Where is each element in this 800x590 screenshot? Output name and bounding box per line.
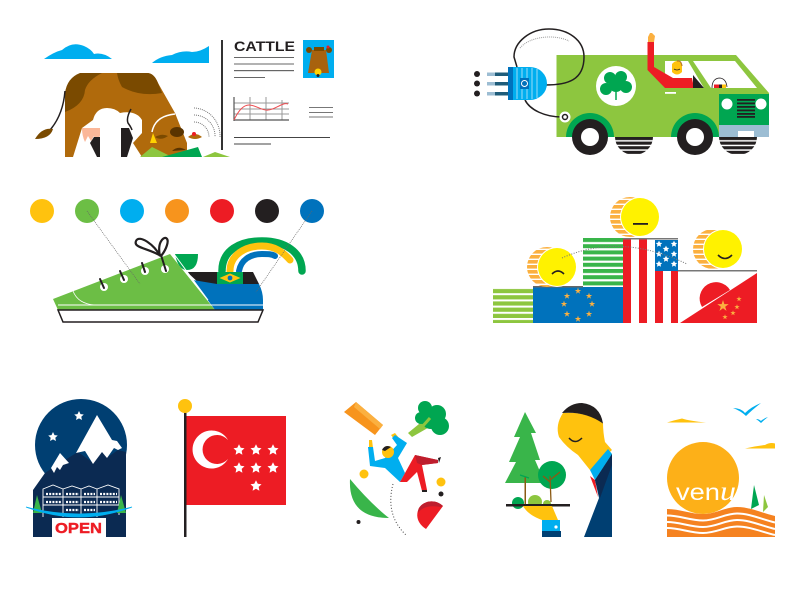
panel: cattle bbox=[35, 38, 334, 157]
van body bbox=[556, 55, 769, 137]
icon: plug bbox=[474, 67, 547, 100]
icon: clouds bbox=[44, 44, 209, 63]
pole ball bbox=[178, 399, 192, 413]
power cord bbox=[514, 29, 584, 122]
icon: cow stamp with bell bbox=[303, 40, 334, 78]
tray bbox=[506, 504, 570, 506]
logo text: ven u bbox=[676, 476, 736, 506]
man climbing bbox=[368, 433, 441, 492]
panel: electric van bbox=[474, 29, 769, 155]
panel: venu logo bbox=[667, 403, 775, 537]
waves bbox=[667, 507, 775, 537]
sun bbox=[667, 442, 739, 514]
line chart bbox=[234, 97, 289, 121]
waiter head bbox=[558, 403, 612, 470]
flag pole bbox=[184, 406, 186, 537]
divider post bbox=[221, 40, 223, 150]
coin: happy bbox=[693, 229, 743, 269]
colour swatches bbox=[30, 199, 324, 223]
text lines bottom bbox=[234, 137, 330, 144]
stars bbox=[48, 411, 84, 441]
dotted path bbox=[391, 484, 406, 535]
ribbon bbox=[26, 507, 132, 517]
panel: mountain hotel badge bbox=[26, 399, 132, 537]
small tree bbox=[538, 461, 566, 502]
wheel arches and wheels bbox=[566, 113, 757, 155]
EU flag bbox=[533, 286, 623, 323]
pointer lines bbox=[87, 211, 312, 292]
birds bbox=[733, 403, 768, 423]
night sky circle bbox=[35, 399, 127, 491]
van front grille bbox=[719, 94, 769, 137]
shoe bbox=[53, 238, 263, 322]
text lines small bbox=[309, 107, 333, 118]
heading: cattle: CATTLE bbox=[234, 38, 295, 54]
van rear window with driver bbox=[648, 33, 704, 94]
flag stars bbox=[233, 444, 279, 491]
hand and cuff bbox=[523, 506, 561, 537]
panel: waiter with trees bbox=[505, 403, 612, 537]
tall tree trunk bbox=[520, 475, 529, 505]
red flag bbox=[186, 416, 286, 505]
China flag bbox=[678, 270, 757, 323]
tall tree bbox=[505, 412, 545, 483]
dark mountain bbox=[33, 450, 126, 537]
sails bbox=[751, 485, 768, 512]
green stripes block middle bbox=[583, 238, 623, 287]
coin: neutral bbox=[610, 197, 660, 237]
red half circle bbox=[417, 501, 443, 529]
icon: clover bbox=[596, 66, 636, 106]
dots bbox=[356, 470, 446, 524]
panel: currencies podium bbox=[493, 197, 757, 323]
panel: flag bbox=[178, 399, 286, 537]
hotel bbox=[43, 485, 119, 517]
clouds bbox=[667, 418, 775, 448]
crescent bbox=[193, 430, 228, 468]
pine trees bbox=[33, 495, 126, 513]
van front window bbox=[693, 61, 757, 88]
panel: falling man bbox=[344, 401, 449, 535]
USA flag bbox=[623, 238, 678, 323]
suit bbox=[584, 449, 612, 537]
rainbow arc bbox=[222, 241, 302, 271]
coin: sad bbox=[527, 247, 577, 287]
green stripes block left bbox=[493, 287, 533, 323]
bushes bbox=[512, 495, 551, 509]
dotted trend line bbox=[562, 246, 687, 264]
open sign: OPEN bbox=[55, 520, 102, 537]
green leaf shape bbox=[350, 479, 389, 518]
snow peaks bbox=[51, 415, 122, 473]
panel: colour swatches and shoe bbox=[30, 199, 324, 322]
cow illustration bbox=[35, 73, 230, 157]
icon: pencil bbox=[344, 402, 383, 435]
text lines bbox=[234, 57, 294, 78]
icon: broccoli bbox=[408, 401, 449, 437]
